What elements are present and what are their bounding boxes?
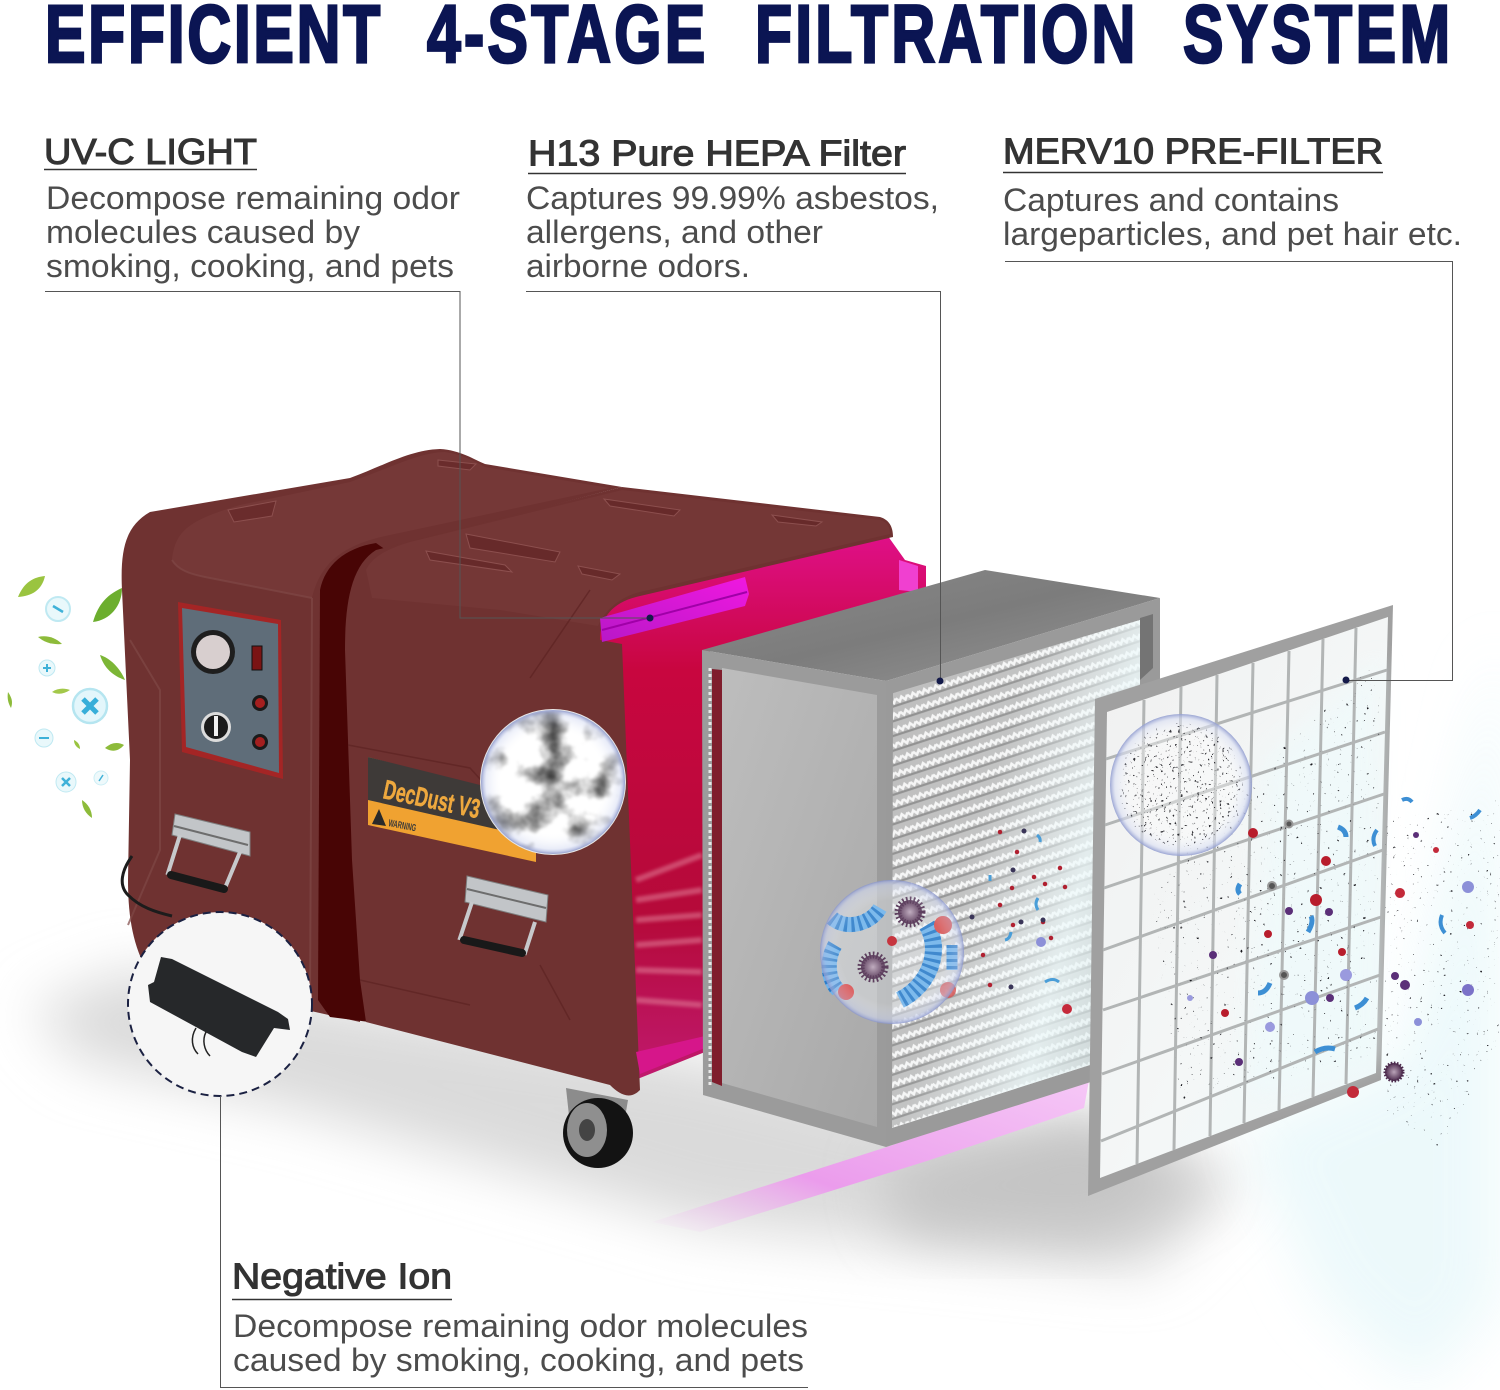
callout: H13 Pure HEPA filter: allergens, and other <box>526 214 823 250</box>
bubble: fine dust <box>1110 714 1252 856</box>
airborne particles on filter <box>972 831 1072 1014</box>
floor shadow <box>30 970 1250 1270</box>
exhaust particles <box>1347 799 1500 1150</box>
product label <box>368 757 536 862</box>
HEPA top face <box>702 570 1160 681</box>
title <box>45 0 1450 80</box>
germs on mesh <box>1187 820 1367 1066</box>
haze on mesh <box>1250 660 1380 1100</box>
rear magenta lip <box>899 560 918 592</box>
control panel <box>178 602 283 779</box>
callout: MERV10 pre-filter: largeparticles, and pet hair etc. <box>1003 216 1462 252</box>
rear grips <box>228 460 476 522</box>
grid <box>1101 628 1387 1164</box>
bubble: bacteria and viruses <box>820 880 964 1024</box>
callout: MERV10 pre-filter <box>1003 130 1462 684</box>
callout: MERV10 pre-filter: Captures and contains <box>1003 182 1339 218</box>
callout: UV-C light: Decompose remaining odor <box>46 180 460 216</box>
rear housing <box>122 449 622 1022</box>
front housing <box>345 487 893 1095</box>
right handle <box>460 876 548 953</box>
callout: negative ion: Negative Ion <box>232 1256 452 1296</box>
icon group: leaves and air ions <box>8 576 125 818</box>
front top surface <box>366 490 890 626</box>
HEPA front frame <box>886 598 1160 1147</box>
callout: UV-C light <box>44 131 654 622</box>
HEPA side opening <box>712 669 722 1086</box>
HEPA side frame <box>702 650 886 1147</box>
caster wheel <box>563 1088 633 1168</box>
callout: H13 Pure HEPA filter <box>526 132 944 684</box>
frame <box>1088 605 1393 1196</box>
negative ion callout circle <box>128 912 312 1096</box>
front crease lines <box>348 590 590 1020</box>
icon: negative ion generator <box>148 957 290 1057</box>
power cable <box>122 856 172 916</box>
dark gap between housings <box>318 543 400 1026</box>
product label: WARNING <box>387 818 417 834</box>
callout: negative ion: Decompose remaining odor molecules <box>233 1308 808 1344</box>
interior streaks <box>636 855 702 1005</box>
ultraviolet floor glow <box>652 1075 1090 1232</box>
callout: MERV10 pre-filter: MERV10 PRE-FILTER <box>1003 130 1383 172</box>
left handle <box>168 814 250 889</box>
callout: negative ion <box>220 1096 808 1388</box>
air purifier machine <box>122 449 926 1168</box>
interior base <box>636 1036 705 1074</box>
bubble: dust fibers <box>480 709 626 855</box>
callout: UV-C light: smoking, cooking, and pets <box>46 248 454 284</box>
callout: H13 Pure HEPA filter: airborne odors. <box>526 248 750 284</box>
callout: UV-C light: molecules caused by <box>46 214 360 250</box>
HEPA filter <box>702 570 1160 1147</box>
rear crease <box>128 560 312 1000</box>
callout: H13 Pure HEPA filter: H13 Pure HEPA Filter <box>528 132 906 174</box>
product label: DecDust V3 <box>381 775 483 824</box>
callout: H13 Pure HEPA filter: Captures 99.99% asbestos, <box>526 180 939 216</box>
air haze <box>1240 640 1500 1390</box>
callout: UV-C light: UV-C LIGHT <box>44 131 257 172</box>
interior chamber <box>598 532 926 1085</box>
callout: negative ion: caused by smoking, cooking, and pets <box>233 1342 804 1378</box>
dust specks <box>1150 660 1380 1100</box>
UV-C lamp <box>600 577 749 642</box>
rear top surface <box>172 452 610 598</box>
MERV10 pre-filter panel <box>1088 605 1393 1196</box>
HEPA pleats <box>892 620 1140 1128</box>
front grips <box>426 499 822 580</box>
